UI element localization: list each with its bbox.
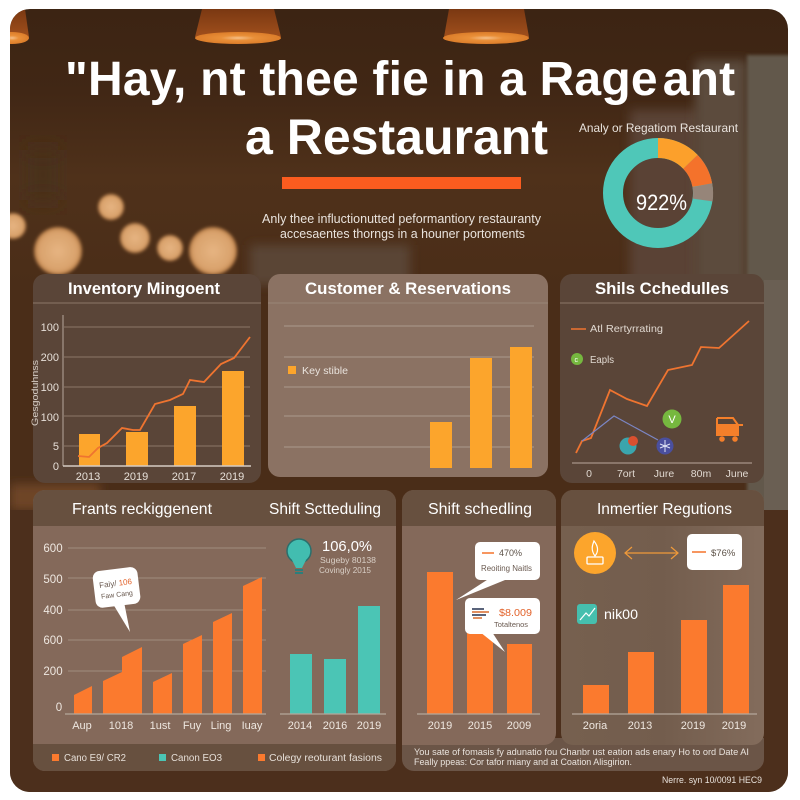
heading: shifts: Shils Cchedulles bbox=[595, 279, 729, 298]
icon: green badge: V bbox=[668, 414, 676, 426]
subtitle bbox=[262, 211, 541, 241]
legend: shifts: c bbox=[574, 357, 578, 364]
callout: dollar value: Totaltenos bbox=[494, 620, 528, 629]
arrow: double-headed bbox=[625, 547, 678, 559]
heading: fronts: Frants reckiggenent bbox=[72, 501, 213, 518]
panel: inventory management: 2017 bbox=[172, 471, 196, 483]
callout: orange chart note: Faw Cang bbox=[101, 590, 133, 601]
panel: footer note bbox=[402, 738, 764, 771]
panel: fronts and shift scheduling: 200 bbox=[43, 666, 63, 678]
source credit: Nerre. syn 10/0091 HEC9 bbox=[662, 775, 762, 786]
panel: fronts and shift scheduling: 1ust bbox=[150, 720, 170, 732]
panel: shift scheduling bbox=[402, 490, 556, 745]
panel: inventory regulations: 2013 bbox=[628, 720, 652, 732]
heading: inventory: Inventory Mingoent bbox=[68, 280, 220, 298]
panel: inventory management: 100 bbox=[41, 412, 59, 424]
icon: cart bbox=[717, 418, 743, 441]
donut chart: 922% bbox=[636, 190, 687, 215]
legend: shifts bbox=[571, 324, 663, 366]
panel: fronts and shift scheduling: 1018 bbox=[109, 720, 133, 732]
panel: shift schedules bbox=[560, 274, 764, 483]
subtitle: accesaentes thorngs in a houner portoments bbox=[280, 226, 525, 241]
panel: inventory management: 100 bbox=[41, 382, 59, 394]
panel: fronts and shift scheduling: 600 bbox=[43, 635, 63, 647]
icon: teal badge bbox=[620, 436, 638, 454]
icon: light bulb bbox=[287, 539, 311, 574]
line chart: inventory bbox=[78, 337, 250, 457]
panel: inventory management: 2013 bbox=[76, 471, 100, 483]
panel: inventory regulations: 2019 bbox=[681, 720, 705, 732]
panel: fronts and shift scheduling: Fuy bbox=[183, 720, 202, 732]
bar chart: shift bbox=[427, 572, 532, 714]
title bbox=[65, 53, 735, 165]
panel: fronts and shift scheduling: 600 bbox=[43, 543, 63, 555]
subtitle: Anly thee influctionutted peformantiory restauranty bbox=[262, 211, 541, 226]
line chart: shifts bbox=[576, 321, 749, 453]
arrow: blue trend bbox=[582, 416, 658, 441]
panel: fronts and shift scheduling bbox=[33, 490, 396, 771]
panel: fronts and shift scheduling: 2016 bbox=[323, 720, 347, 732]
icon: pendant lamp center bbox=[195, 9, 281, 44]
panel: shift schedules: 0 bbox=[586, 468, 592, 480]
panel: fronts and shift scheduling: 2019 bbox=[357, 720, 381, 732]
icon: pendant lamp left bbox=[10, 10, 29, 44]
panel: inventory regulations bbox=[561, 490, 764, 745]
label: nik00: nik00 bbox=[604, 606, 638, 622]
panel: inventory regulations: 2oria bbox=[583, 720, 608, 732]
panel: footer note: You sate of fomasis fy adunatio fou Chanbr ust eation ads enary Ho to ord Date AI bbox=[414, 747, 749, 758]
heading: regulations: Inmertier Regutions bbox=[597, 501, 732, 518]
panel: shift scheduling: 2015 bbox=[468, 720, 492, 732]
callout: orange chart note: Faiy/ 106 bbox=[99, 577, 133, 590]
panel: inventory management: 200 bbox=[41, 352, 59, 364]
callout: orange chart note bbox=[92, 566, 141, 632]
panel: inventory management: Gesgoduhnss bbox=[30, 359, 40, 426]
stat: shift percentage: Covingly 2015 bbox=[319, 566, 372, 575]
panel: shift scheduling: 2009 bbox=[507, 720, 531, 732]
donut chart bbox=[579, 121, 739, 238]
callout: percentage: 470% bbox=[499, 548, 522, 558]
bar chart: inventory bbox=[79, 371, 244, 466]
callout: percentage: Reoiting Naitls bbox=[481, 564, 532, 573]
stat: shift percentage: 106,0% bbox=[322, 538, 372, 555]
callout: percentage bbox=[456, 542, 540, 600]
legend: shifts: Eapls bbox=[590, 355, 614, 366]
stat: shift percentage: Sugeby 80138 bbox=[320, 556, 377, 565]
callout: dollar value: $8.009 bbox=[499, 608, 532, 619]
panel: fronts and shift scheduling: 500 bbox=[43, 574, 63, 586]
callout: percentage box: $76% bbox=[711, 548, 736, 559]
panel: inventory regulations: 2019 bbox=[722, 720, 746, 732]
callout: dollar value bbox=[465, 598, 540, 652]
panel: footer note: Feally ppeas: Cor tafor miany and at Coation Alisgirion. bbox=[414, 757, 632, 768]
panel: fronts and shift scheduling: Iuay bbox=[242, 720, 263, 732]
legend: bottom bbox=[52, 753, 382, 764]
icon: teal trend square bbox=[577, 604, 597, 624]
bar chart: reservations bbox=[430, 347, 532, 468]
donut chart: Analy or Regatiom Restaurant bbox=[579, 121, 739, 135]
legend: bottom: Canon EO3 bbox=[171, 753, 222, 764]
panel: customer and reservations bbox=[268, 274, 548, 477]
panel: inventory management: 2019 bbox=[124, 471, 148, 483]
panel: inventory management: 5 bbox=[53, 441, 59, 453]
panel: shift schedules: June bbox=[726, 468, 749, 480]
heading: customer: Customer & Reservations bbox=[305, 279, 511, 298]
panel: shift schedules: 80m bbox=[691, 468, 711, 480]
icon: pendant lamp right bbox=[443, 9, 529, 44]
panel: shift schedules: Jure bbox=[654, 468, 674, 480]
panel: fronts and shift scheduling: Ling bbox=[211, 720, 231, 732]
legend: shifts: Atl Rertyrrating bbox=[590, 324, 663, 335]
title underline bar bbox=[282, 177, 521, 189]
title: "Hay, nt thee fie in a Rageant bbox=[65, 53, 735, 106]
heading: shift scheduling: Shift schedling bbox=[428, 501, 532, 518]
panel: inventory management: 0 bbox=[53, 461, 59, 473]
heading: shift scheduling: Shift Sctteduling bbox=[269, 501, 381, 518]
icon: green badge bbox=[662, 410, 682, 428]
callout: percentage box bbox=[687, 534, 742, 570]
legend: bottom: Cano E9/ CR2 bbox=[64, 753, 126, 764]
panel: inventory management: 100 bbox=[41, 322, 59, 334]
bar chart: regulations bbox=[583, 585, 749, 714]
panel: fronts and shift scheduling: 0 bbox=[56, 702, 62, 714]
bar chart: orange sloped bars bbox=[74, 577, 262, 714]
icon: blue badge bbox=[656, 438, 674, 454]
panel: inventory management: 2019 bbox=[220, 471, 244, 483]
panel: fronts and shift scheduling: Aup bbox=[72, 720, 92, 732]
legend: key: Key stible bbox=[302, 366, 348, 377]
panel: inventory management bbox=[30, 274, 261, 483]
icon: orange badge bbox=[574, 532, 616, 574]
panel: shift schedules: 7ort bbox=[617, 468, 635, 480]
panel: fronts and shift scheduling: 2014 bbox=[288, 720, 312, 732]
title: a Restaurant bbox=[245, 109, 548, 165]
legend: bottom: Colegy reoturant fasions bbox=[269, 753, 382, 764]
stat: shift percentage bbox=[319, 538, 377, 575]
bar chart: teal bars bbox=[290, 606, 380, 714]
panel: fronts and shift scheduling: 400 bbox=[43, 605, 63, 617]
panel: shift scheduling: 2019 bbox=[428, 720, 452, 732]
